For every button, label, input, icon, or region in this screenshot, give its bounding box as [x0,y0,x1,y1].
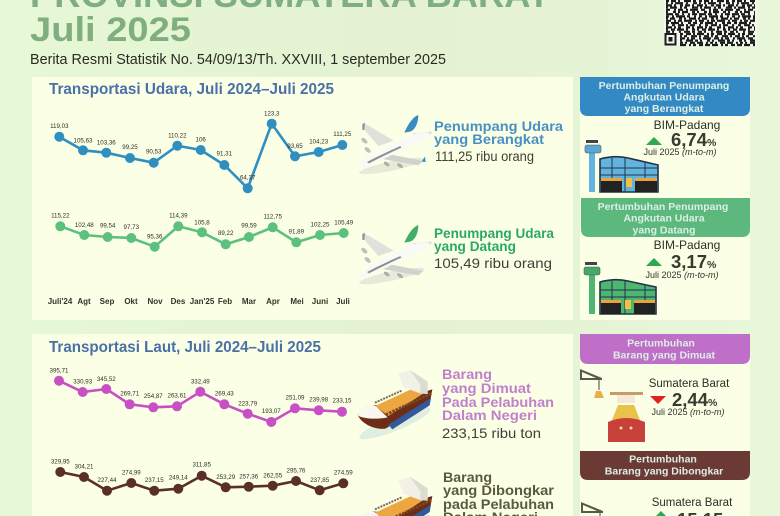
panel: growth departing passengers: Angkutan Udara [623,92,705,104]
line chart: barang dibongkar: 329,95 [51,458,70,465]
line chart: penumpang datang: 99,54 [100,223,116,230]
panel: growth arriving passengers: Angkutan Udara [623,212,705,224]
line chart: penumpang berangkat: 106 [196,136,206,143]
line chart: barang dibongkar: 237,15 [145,477,164,484]
month axis labels: Feb [218,297,232,306]
line chart: barang dimuat: 239,98 [309,397,329,404]
line chart: penumpang berangkat: 104,23 [309,138,329,145]
line chart: barang dimuat: 269,43 [215,391,234,398]
line chart: penumpang datang: 89,22 [218,230,234,237]
icon: cargo ship loaded [357,370,433,444]
panel: growth goods loaded [580,334,750,452]
line chart: penumpang datang: 102,48 [75,222,94,229]
line chart: barang dibongkar: 311,85 [192,462,211,469]
line chart: barang dimuat [50,368,352,427]
line chart: barang dimuat: 233,15 [333,398,352,405]
icon: airport [584,262,656,314]
line chart: barang dimuat: 395,71 [50,368,69,375]
panel: growth departing passengers: Juli 2025 (m-to-m) [643,147,717,157]
line chart: barang dimuat: 269,71 [120,391,140,398]
month axis labels: Sep [100,297,114,306]
panel: growth arriving passengers: Juli 2025 (m-to-m) [645,270,719,280]
line chart: barang dibongkar: 249,14 [169,475,188,482]
line chart: penumpang datang: 105,8 [194,220,210,227]
panel: growth goods unloaded: Pertumbuhan [629,454,697,466]
panel: growth goods unloaded: Barang yang Dibongkar [605,466,723,478]
line chart: penumpang berangkat: 64,37 [240,175,256,182]
line chart: penumpang datang: 99,59 [241,223,257,230]
month axis labels: Mar [242,297,256,306]
icon: cargo ship unloaded [357,477,433,516]
text: barang dimuat: yang Dimuat [442,380,531,396]
text: barang dimuat: Pada Pelabuhan [442,394,554,410]
line chart: barang dibongkar: 262,55 [263,472,283,479]
line chart: penumpang berangkat: 90,53 [146,149,162,156]
text: penumpang datang: Penumpang Udara [434,226,554,241]
line chart: barang dibongkar: 253,29 [216,474,236,481]
line chart: penumpang datang: 102,25 [311,222,330,229]
line chart: barang dibongkar: 274,99 [122,470,141,477]
subtitle: Berita Resmi Statistik No. 54/09/13/Th. XXVIII, 1 september 2025 [30,52,446,68]
panel: growth arriving passengers: Pertumbuhan Penumpang [598,201,728,213]
line chart: penumpang datang: 112,75 [263,214,282,221]
title: Juli 2025 [30,11,191,49]
panel: growth goods loaded: Barang yang Dimuat [613,350,716,362]
text: penumpang berangkat: yang Berangkat [434,132,545,147]
line chart: penumpang datang: 105,49 [334,220,354,227]
panel: growth departing passengers: Pertumbuhan Penumpang [599,80,729,92]
month axis labels: Agt [77,297,91,306]
panel: growth departing passengers: BIM-Padang [654,118,720,132]
line chart: penumpang berangkat: 110,22 [168,132,187,139]
panel: growth goods loaded: Sumatera Barat [649,378,730,390]
line chart: penumpang datang: 95,36 [147,233,163,240]
line chart: penumpang berangkat: 91,31 [217,151,233,158]
icon: crane [581,502,603,516]
panel: growth goods unloaded: Sumatera Barat [652,497,733,509]
line chart: penumpang datang [51,212,354,252]
panel: sea transport [32,334,573,516]
text: barang dimuat: Barang [442,366,492,382]
header [581,198,750,237]
icon: arriving plane [358,225,432,287]
heading: air transport: Transportasi Udara, Juli 2024–Juli 2025 [49,81,334,98]
text: barang dibongkar: pada Pelabuhan [443,496,554,512]
line chart: barang dibongkar: 274,59 [334,470,353,477]
month axis labels [48,297,350,306]
month axis labels: Mei [290,297,304,306]
text: barang dimuat [442,366,554,441]
line chart: penumpang berangkat: 103,36 [97,139,116,146]
panel: growth departing passengers: 6,74% [671,129,717,150]
icon: crane [580,369,604,398]
text: barang dimuat: 233,15 ribu ton [442,425,541,441]
line chart: barang dimuat: 251,09 [286,394,305,401]
text: barang dimuat: Dalam Negeri [442,407,537,423]
header [580,334,750,364]
text: penumpang datang: yang Datang [434,239,516,254]
line chart: barang dimuat: 223,79 [238,400,258,407]
line chart: barang dibongkar: 227,44 [98,477,117,484]
panel: growth goods loaded: Pertumbuhan [627,338,695,350]
line chart: penumpang datang: 115,22 [51,212,70,219]
month axis labels: Apr [266,297,280,306]
panel: growth arriving passengers: BIM-Padang [654,238,720,252]
line chart: penumpang datang: 97,73 [124,224,140,231]
header [580,77,750,116]
header [580,451,750,480]
line chart: barang dimuat: 330,93 [73,378,93,385]
panel: growth goods loaded: Juli 2025 (m-to-m) [651,407,725,417]
line chart: barang dibongkar: 304,21 [75,464,94,471]
text: penumpang berangkat [434,119,564,164]
icon: airport [585,140,658,192]
month axis labels: Nov [147,297,163,306]
text: penumpang datang [434,226,554,271]
line chart: barang dibongkar: 295,76 [287,468,306,475]
heading: sea transport: Transportasi Laut, Juli 2024–Juli 2025 [49,339,321,356]
line chart: barang dibongkar: 237,85 [310,477,330,484]
panel: growth departing passengers [580,77,750,199]
icon: ship front [608,392,645,442]
line chart: barang dibongkar [51,458,353,496]
line chart: penumpang berangkat: 99,25 [122,144,138,151]
line chart: penumpang berangkat [50,111,352,193]
panel: growth arriving passengers: 3,17% [671,251,717,272]
text: barang dibongkar: yang Dibongkar [443,482,555,498]
month axis labels: Des [171,297,186,306]
line chart: barang dibongkar: 257,36 [239,473,259,480]
line chart: penumpang berangkat: 119,03 [50,123,69,130]
panel: growth arriving passengers: yang Datang [632,224,696,236]
line chart: penumpang berangkat: 111,25 [333,131,352,138]
line chart: barang dimuat: 332,49 [191,378,210,385]
text: penumpang datang: 105,49 ribu orang [434,255,552,271]
text: penumpang berangkat: 111,25 ribu orang [435,148,534,164]
panel: growth goods loaded: 2,44% [672,389,718,410]
line chart: penumpang berangkat: 105,63 [74,137,93,144]
line chart: penumpang datang: 114,39 [169,212,188,219]
month axis labels: Juni [312,297,328,306]
line chart: penumpang berangkat: 93,65 [287,143,303,150]
month axis labels: Okt [124,297,138,306]
line chart: penumpang berangkat: 123,3 [264,111,280,118]
icon: departing plane [358,115,432,177]
qr code [664,0,757,46]
line chart: barang dimuat: 345,52 [97,376,116,383]
month axis labels: Jan'25 [190,297,215,306]
text: barang dibongkar: Barang [443,469,492,485]
panel: growth departing passengers: yang Berangkat [625,103,704,115]
title [30,0,550,49]
line chart: penumpang datang: 91,89 [289,229,305,236]
month axis labels: Juli'24 [48,297,73,306]
panel: growth arriving passengers [580,198,750,320]
panel: growth goods unloaded [580,450,750,516]
text: penumpang berangkat: Penumpang Udara [434,119,564,134]
month axis labels: Juli [336,297,350,306]
line chart: barang dimuat: 193,07 [262,408,281,415]
text: barang dibongkar [443,469,555,516]
line chart: barang dimuat: 254,87 [144,393,163,400]
line chart: barang dimuat: 263,61 [168,392,187,399]
